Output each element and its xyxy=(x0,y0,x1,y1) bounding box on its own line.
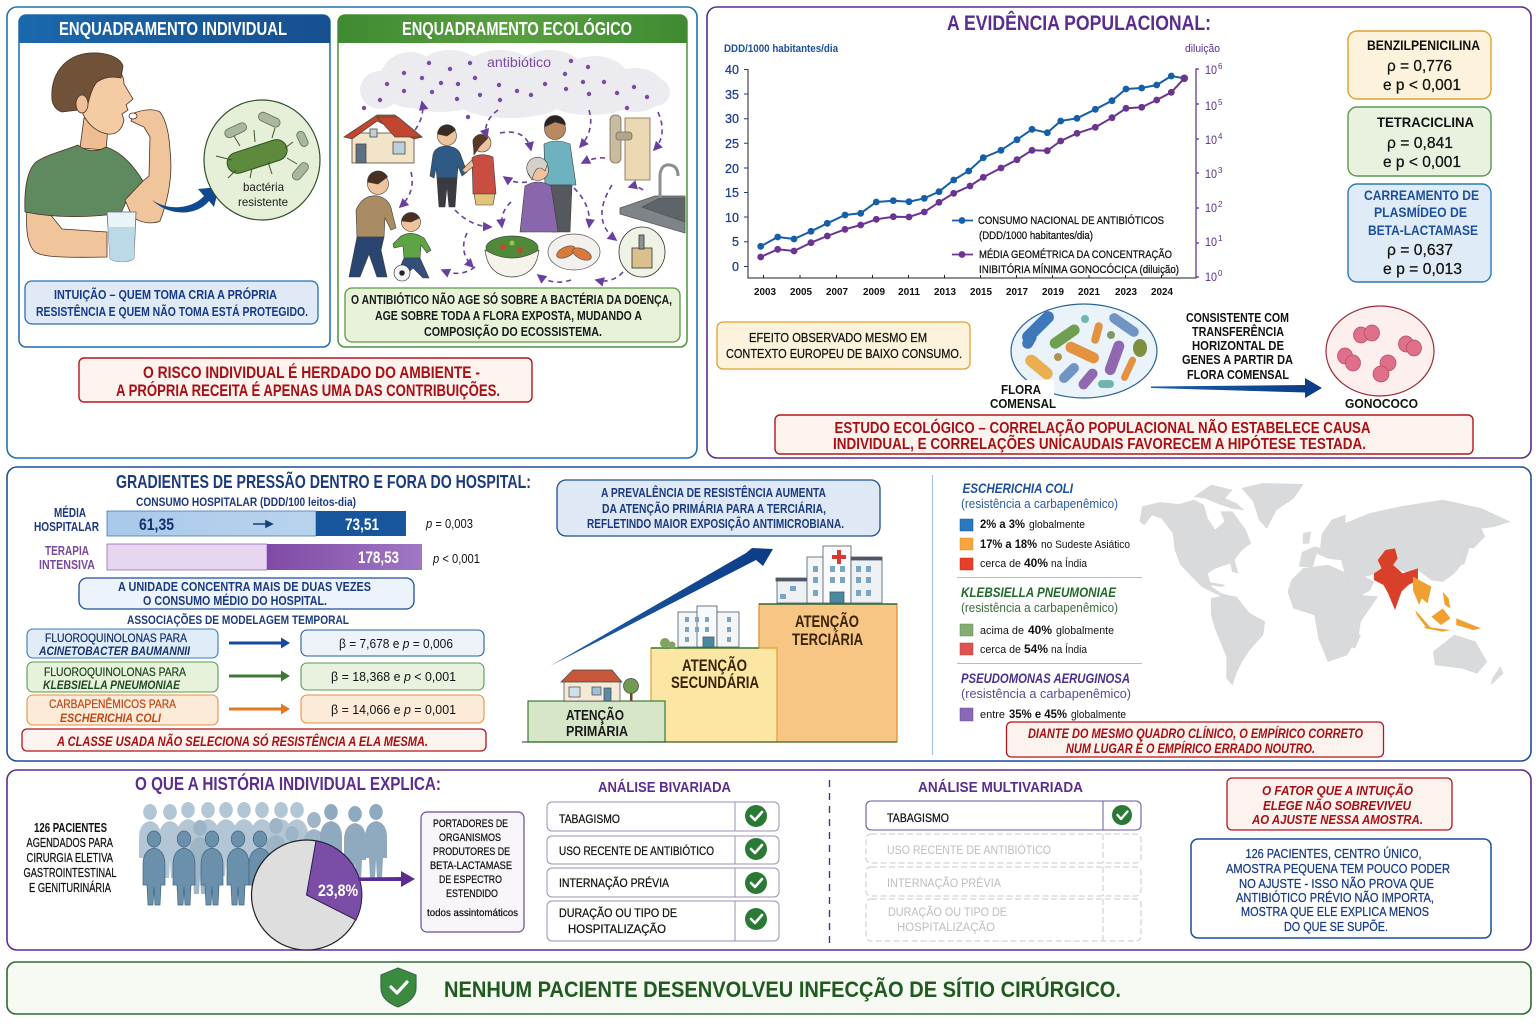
bar chart: consumo hospitalar: 61,35 xyxy=(139,515,174,534)
stat card: carreamento de plasmídeo: PLASMÍDEO DE xyxy=(1374,204,1467,220)
panel: gradientes de pressão xyxy=(7,467,1531,761)
callout: unidade concentra xyxy=(79,578,414,609)
icon: gonococo xyxy=(1326,306,1434,411)
line chart: consumo e MIC: 30 xyxy=(725,111,739,126)
icon: gonococo: GONOCOCO xyxy=(1345,396,1418,411)
row: fluoroquinolonas e acinetobacter: ACINETOBACTER BAUMANNII xyxy=(38,644,191,658)
bar chart: consumo hospitalar: INTENSIVA xyxy=(39,558,95,572)
callout: amostra pequena xyxy=(1191,839,1491,938)
card: portadores ESBL: ESTENDIDO xyxy=(446,888,498,900)
line chart: consumo e MIC: 10 xyxy=(1205,135,1217,147)
row: fluoroquinolonas e klebsiella xyxy=(27,662,484,692)
stat card: benzilpenicilina xyxy=(1348,31,1491,99)
line chart: consumo e MIC: 2024 xyxy=(1151,286,1173,298)
divider: map section xyxy=(932,475,934,755)
arrow: para portadores xyxy=(358,871,415,887)
arrow: rising resistance xyxy=(550,548,773,666)
column: análise bivariada: ANÁLISE BIVARIADA xyxy=(598,779,731,796)
line chart: consumo e MIC: 25 xyxy=(725,136,739,151)
line chart: consumo e MIC: 3 xyxy=(1218,166,1223,175)
card: portadores ESBL: todos assintomáticos xyxy=(427,907,518,919)
callout: contexto europeu: EFEITO OBSERVADO MESMO EM xyxy=(749,330,927,345)
card: portadores ESBL: ORGANISMOS xyxy=(439,832,501,844)
chart legend: INIBITÓRIA MÍNIMA GONOCÓCICA (diluição) xyxy=(979,263,1179,276)
line chart: consumo e MIC: diluição xyxy=(1185,43,1220,55)
data series: MIC gonocócica xyxy=(757,74,1188,260)
legend: escherichia coli xyxy=(960,480,1130,570)
callout: amostra pequena: ANTIBIÓTICO PRÉVIO NÃO IMPORTA, xyxy=(1236,890,1434,905)
stat card: carreamento de plasmídeo: e p = 0,013 xyxy=(1383,261,1462,278)
card: portadores ESBL: PRODUTORES DE xyxy=(433,846,510,858)
line chart: consumo e MIC: 10 xyxy=(1205,203,1217,215)
column: análise multivariada: DURAÇÃO OU TIPO DE xyxy=(888,905,1007,919)
line chart: consumo e MIC: DDD/1000 habitantes/dia xyxy=(724,43,839,55)
icon: house xyxy=(344,115,422,163)
line chart: consumo e MIC: 4 xyxy=(1218,132,1223,141)
line chart: consumo e MIC: 2021 xyxy=(1078,286,1100,298)
card: portadores ESBL: DE ESPECTRO xyxy=(439,874,502,886)
column: análise bivariada: DURAÇÃO OU TIPO DE xyxy=(559,906,677,920)
card: portadores ESBL: PORTADORES DE xyxy=(433,818,508,830)
legend: klebsiella pneumoniae: na Índia xyxy=(1051,643,1088,656)
chart legend xyxy=(952,214,1179,276)
callout: empírico correto xyxy=(1006,722,1384,757)
callout: fator que a intuição elege: ELEGE NÃO SOBREVIVEU xyxy=(1263,798,1412,813)
callout: prevalência aumenta: REFLETINDO MAIOR EXPOSIÇÃO ANTIMICROBIANA. xyxy=(587,516,844,531)
callout: intuição xyxy=(25,281,318,324)
heading: enquadramento individual: ENQUADRAMENTO INDIVIDUAL xyxy=(59,19,287,39)
legend: klebsiella pneumoniae: (resistência a carbapenêmico) xyxy=(961,601,1118,615)
text: conclusão: NENHUM PACIENTE DESENVOLVEU INFECÇÃO DE SÍTIO CIRÚRGICO. xyxy=(444,977,1121,1002)
line chart: consumo e MIC: 2005 xyxy=(790,286,812,298)
map: world resistance xyxy=(1140,483,1510,685)
legend: escherichia coli: ESCHERICHIA COLI xyxy=(962,480,1074,496)
step: atenção primária: ATENÇÃO xyxy=(566,706,624,724)
callout: antibiótico age sobre a flora: O ANTIBIÓTICO NÃO AGE SÓ SOBRE A BACTÉRIA DA DOENÇA, xyxy=(351,292,672,307)
heading: a evidência populacional: A EVIDÊNCIA POPULACIONAL: xyxy=(947,11,1211,35)
callout: intuição: RESISTÊNCIA E QUEM NÃO TOMA ESTÁ PROTEGIDO. xyxy=(36,304,308,319)
text block: 126 pacientes: 126 PACIENTES xyxy=(34,821,107,835)
pie chart: 23,8%: 23,8% xyxy=(318,881,358,900)
column: análise multivariada: HOSPITALIZAÇÃO xyxy=(897,920,995,934)
legend: escherichia coli: no Sudeste Asiático xyxy=(1041,539,1130,551)
icon: resistant bacterium circle: resistente xyxy=(238,195,288,209)
stat card: carreamento de plasmídeo xyxy=(1348,184,1491,282)
callout: estudo ecológico: ESTUDO ECOLÓGICO – CORRELAÇÃO POPULACIONAL NÃO ESTABELECE CAUSA xyxy=(834,419,1370,437)
panel: o que a história individual explica xyxy=(7,770,1531,950)
callout: amostra pequena: AMOSTRA PEQUENA TEM POUCO PODER xyxy=(1226,861,1450,876)
row: fluoroquinolonas e acinetobacter: FLUOROQUINOLONAS PARA xyxy=(45,631,187,645)
heading: enquadramento ecológico xyxy=(338,15,687,43)
stat card: benzilpenicilina: BENZILPENICILINA xyxy=(1367,37,1480,53)
line chart: consumo e MIC: 0 xyxy=(732,259,739,274)
icon: couple talking xyxy=(430,125,496,207)
callout: estudo ecológico xyxy=(775,415,1473,454)
column: análise multivariada: TABAGISMO xyxy=(887,811,949,825)
line chart: consumo e MIC: 2023 xyxy=(1115,286,1137,298)
column: análise multivariada: INTERNAÇÃO PRÉVIA xyxy=(887,875,1001,890)
icon: dashed transmission arrows xyxy=(400,102,662,282)
text block: 126 pacientes: AGENDADOS PARA xyxy=(26,836,113,850)
icon: salad bowl xyxy=(485,236,539,277)
icon: flora comensal: FLORA xyxy=(1001,382,1042,397)
column: análise bivariada: TABAGISMO xyxy=(559,812,620,826)
line chart: consumo e MIC: 35 xyxy=(725,87,739,102)
stat card: carreamento de plasmídeo: BETA-LACTAMASE xyxy=(1368,222,1478,238)
legend: pseudomonas aeruginosa: entre xyxy=(980,709,1005,721)
legend: klebsiella pneumoniae: globalmente xyxy=(1056,625,1114,637)
text block: 126 pacientes xyxy=(24,821,117,895)
icon: kitchen sink xyxy=(620,165,685,233)
line chart: consumo e MIC: 5 xyxy=(732,234,739,249)
row: carbapenêmicos e escherichia xyxy=(27,695,484,725)
step: atenção secundária: SECUNDÁRIA xyxy=(671,673,759,692)
icon: tertiary hospital xyxy=(776,546,882,603)
panel: enquadramento individual vs ecológico xyxy=(7,7,697,458)
column: análise bivariada: USO RECENTE DE ANTIBIÓTICO xyxy=(559,843,714,858)
banner: nenhum paciente xyxy=(7,962,1531,1014)
icon: crowd of patients xyxy=(139,802,387,905)
legend: pseudomonas aeruginosa: (resistência a carbapenêmico) xyxy=(961,687,1131,701)
legend: pseudomonas aeruginosa: 35% e 45% xyxy=(1009,709,1067,721)
icon: resistant bacterium circle: bactéria xyxy=(243,180,284,194)
panel: enquadramento ecológico xyxy=(338,15,687,347)
line chart: consumo e MIC: 2 xyxy=(1218,200,1223,209)
step: atenção secundária xyxy=(651,648,777,742)
arrow: flora para gonococo xyxy=(1151,378,1322,398)
icon: plate of meat xyxy=(548,234,600,270)
legend: pseudomonas aeruginosa: PSEUDOMONAS AERUGINOSA xyxy=(961,670,1130,686)
icon: clinic xyxy=(561,670,638,701)
legend: escherichia coli: 40% xyxy=(1024,558,1048,570)
line chart: consumo e MIC: 10 xyxy=(1205,272,1217,284)
stat card: tetraciclina: e p < 0,001 xyxy=(1383,154,1461,171)
line chart: consumo e MIC: 10 xyxy=(1205,169,1217,181)
row: fluoroquinolonas e klebsiella: FLUOROQUINOLONAS PARA xyxy=(44,665,186,679)
line chart: consumo e MIC: 10 xyxy=(1205,101,1217,113)
step: atenção secundária: ATENÇÃO xyxy=(682,655,747,675)
row: fluoroquinolonas e acinetobacter xyxy=(27,629,484,658)
line chart: consumo e MIC: 2013 xyxy=(934,286,956,298)
card: portadores ESBL: BETA-LACTAMASE xyxy=(430,860,512,872)
line chart: consumo e MIC: 0 xyxy=(1218,269,1223,278)
chart legend: CONSUMO NACIONAL DE ANTIBIÓTICOS xyxy=(978,214,1164,227)
legend: klebsiella pneumoniae xyxy=(960,584,1118,656)
callout: empírico correto: DIANTE DO MESMO QUADRO CLÍNICO, O EMPÍRICO CORRETO xyxy=(1028,726,1363,741)
callout: intuição: INTUIÇÃO – QUEM TOMA CRIA A PRÓPRIA xyxy=(54,287,278,302)
heading: enquadramento ecológico: ENQUADRAMENTO ECOLÓGICO xyxy=(402,18,632,39)
bar chart: consumo hospitalar: 178,53 xyxy=(358,548,399,567)
line chart: consumo e MIC: 10 xyxy=(725,210,739,225)
text block: transferência horizontal: FLORA COMENSAL xyxy=(1187,367,1289,382)
bar chart: consumo hospitalar: MÉDIA xyxy=(54,505,86,520)
card: portadores ESBL xyxy=(421,812,524,932)
text block: transferência horizontal: CONSISTENTE COM xyxy=(1186,310,1289,325)
text block: transferência horizontal xyxy=(1182,310,1294,382)
icon: antibiotic cloud: antibiótico xyxy=(487,54,551,70)
icon: flora comensal: COMENSAL xyxy=(990,396,1056,411)
panel: enquadramento individual xyxy=(19,15,330,347)
text block: transferência horizontal: HORIZONTAL DE xyxy=(1192,338,1284,353)
callout: unidade concentra: O CONSUMO MÉDIO DO HOSPITAL. xyxy=(143,593,327,608)
heading: associações temporais: ASSOCIAÇÕES DE MODELAGEM TEMPORAL xyxy=(127,612,349,627)
bar chart: consumo hospitalar: HOSPITALAR xyxy=(34,520,99,534)
line chart: consumo e MIC: 15 xyxy=(725,185,739,200)
icon: water tap circle xyxy=(619,227,665,277)
legend: escherichia coli: 2% a 3% xyxy=(980,519,1025,531)
stat card: benzilpenicilina: e p < 0,001 xyxy=(1383,77,1461,94)
panel: a evidência populacional xyxy=(707,7,1531,458)
icon: secondary hospital xyxy=(660,606,739,648)
step: atenção terciária: TERCIÁRIA xyxy=(792,630,863,649)
icon: man taking a pill xyxy=(25,53,171,262)
callout: risco individual: O RISCO INDIVIDUAL É HERDADO DO AMBIENTE - xyxy=(143,363,480,382)
column: análise multivariada: USO RECENTE DE ANTIBIÓTICO xyxy=(887,842,1051,857)
callout: estudo ecológico: INDIVIDUAL, E CORRELAÇÕES UNICAUDAIS FAVORECEM A HIPÓTESE TESTADA. xyxy=(833,435,1366,453)
bar chart: consumo hospitalar xyxy=(34,495,480,572)
text block: 126 pacientes: E GENITURINÁRIA xyxy=(29,880,111,895)
text block: 126 pacientes: GASTROINTESTINAL xyxy=(24,866,117,880)
callout: empírico correto: NUM LUGAR É O EMPÍRICO ERRADO NOUTRO. xyxy=(1066,741,1315,756)
data series: consumo nacional xyxy=(757,73,1184,250)
stat card: benzilpenicilina: ρ = 0,776 xyxy=(1387,58,1452,75)
row: carbapenêmicos e escherichia: ESCHERICHIA COLI xyxy=(60,711,162,725)
bar chart: consumo hospitalar: p < 0,001 xyxy=(432,551,480,566)
heading: história individual: O QUE A HISTÓRIA INDIVIDUAL EXPLICA: xyxy=(135,773,441,794)
line chart: consumo e MIC: 2009 xyxy=(863,286,885,298)
step: atenção terciária xyxy=(759,604,897,742)
icon: antibiotic cloud xyxy=(360,50,670,119)
step: atenção terciária: ATENÇÃO xyxy=(795,611,859,631)
row: fluoroquinolonas e klebsiella: KLEBSIELLA PNEUMONIAE xyxy=(43,678,181,692)
step: atenção primária xyxy=(528,701,665,742)
callout: unidade concentra: A UNIDADE CONCENTRA MAIS DE DUAS VEZES xyxy=(118,580,371,594)
callout: prevalência aumenta: A PREVALÊNCIA DE RESISTÊNCIA AUMENTA xyxy=(601,485,826,500)
column: análise multivariada: ANÁLISE MULTIVARIADA xyxy=(918,779,1083,796)
callout: contexto europeu: CONTEXTO EUROPEU DE BAIXO CONSUMO. xyxy=(726,346,962,361)
legend: klebsiella pneumoniae: 54% xyxy=(1024,644,1048,656)
callout: antibiótico age sobre a flora: AGE SOBRE TODA A FLORA EXPOSTA, MUDANDO A xyxy=(375,308,642,323)
legend: pseudomonas aeruginosa: globalmente xyxy=(1071,709,1126,721)
callout: amostra pequena: NO AJUSTE - ISSO NÃO PROVA QUE xyxy=(1239,876,1434,891)
text block: transferência horizontal: TRANSFERÊNCIA xyxy=(1192,324,1284,339)
line chart: consumo e MIC: 2003 xyxy=(754,286,776,298)
callout: amostra pequena: DO QUE SE SUPÕE. xyxy=(1284,919,1388,934)
icon: flora comensal xyxy=(990,304,1157,411)
stat card: carreamento de plasmídeo: CARREAMENTO DE xyxy=(1364,187,1479,203)
line chart: consumo e MIC xyxy=(724,43,1223,298)
callout: amostra pequena: MOSTRA QUE ELE EXPLICA MENOS xyxy=(1241,904,1429,919)
line chart: consumo e MIC: 2011 xyxy=(898,286,920,298)
legend: klebsiella pneumoniae: cerca de xyxy=(980,644,1021,656)
bar chart: consumo hospitalar: p = 0,003 xyxy=(425,516,473,531)
line chart: consumo e MIC: 6 xyxy=(1218,62,1223,71)
legend: klebsiella pneumoniae: KLEBSIELLA PNEUMONIAE xyxy=(961,584,1117,600)
callout: classe usada: A CLASSE USADA NÃO SELECIONA SÓ RESISTÊNCIA A ELA MESMA. xyxy=(56,734,428,749)
chart legend: MÉDIA GEOMÉTRICA DA CONCENTRAÇÃO xyxy=(979,248,1172,261)
icon: man and grandmother xyxy=(520,115,576,232)
icon: resistant bacterium circle xyxy=(204,100,320,220)
row: fluoroquinolonas e klebsiella: β = 18,368 e p < 0,001 xyxy=(331,669,456,684)
callout: prevalência aumenta: DA ATENÇÃO PRIMÁRIA PARA A TERCIÁRIA, xyxy=(602,501,826,516)
row: carbapenêmicos e escherichia: β = 14,066 e p = 0,001 xyxy=(331,702,456,717)
icon: curved arrow xyxy=(152,187,219,213)
legend: escherichia coli: na Índia xyxy=(1051,557,1088,570)
text block: transferência horizontal: GENES A PARTIR DA xyxy=(1182,352,1294,367)
bar chart: consumo hospitalar: TERAPIA xyxy=(45,544,89,558)
chart: staircase of care levels xyxy=(522,546,897,742)
stat card: tetraciclina: TETRACICLINA xyxy=(1377,114,1474,130)
legend: escherichia coli: cerca de xyxy=(980,558,1021,570)
callout: classe usada xyxy=(22,729,486,751)
bar chart: consumo hospitalar: CONSUMO HOSPITALAR (DDD/100 leitos-dia) xyxy=(136,495,356,509)
line chart: consumo e MIC: 10 xyxy=(1205,237,1217,249)
legend: klebsiella pneumoniae: 40% xyxy=(1028,625,1052,637)
row: carbapenêmicos e escherichia: CARBAPENÊMICOS PARA xyxy=(49,696,176,711)
step: atenção primária: PRIMÁRIA xyxy=(566,723,628,740)
line chart: consumo e MIC: 20 xyxy=(725,161,739,176)
line chart: consumo e MIC: 5 xyxy=(1218,98,1223,107)
callout: antibiótico age sobre a flora xyxy=(345,288,680,342)
column: análise bivariada: HOSPITALIZAÇÃO xyxy=(568,922,666,936)
callout: risco individual xyxy=(79,358,532,402)
icon: father and child playing football xyxy=(349,171,431,281)
text block: 126 pacientes: CIRURGIA ELETIVA xyxy=(26,851,113,865)
heading: enquadramento individual xyxy=(19,15,330,43)
column: análise bivariada xyxy=(547,779,779,941)
callout: fator que a intuição elege xyxy=(1227,778,1452,830)
line chart: consumo e MIC: 2019 xyxy=(1042,286,1064,298)
stat card: tetraciclina xyxy=(1348,107,1491,176)
stat card: carreamento de plasmídeo: ρ = 0,637 xyxy=(1387,242,1453,259)
legend: escherichia coli: 17% a 18% xyxy=(980,539,1037,551)
line chart: consumo e MIC: 40 xyxy=(725,62,739,77)
callout: contexto europeu xyxy=(717,322,970,369)
line chart: consumo e MIC: 2007 xyxy=(826,286,848,298)
callout: prevalência aumenta xyxy=(557,480,880,536)
heading: gradientes de pressão: GRADIENTES DE PRESSÃO DENTRO E FORA DO HOSPITAL: xyxy=(116,471,531,492)
bar chart: consumo hospitalar: 73,51 xyxy=(345,515,379,534)
line chart: consumo e MIC: 2015 xyxy=(970,286,992,298)
column: análise bivariada: INTERNAÇÃO PRÉVIA xyxy=(559,875,669,890)
line chart: consumo e MIC: 2017 xyxy=(1006,286,1028,298)
chart legend: (DDD/1000 habitantes/dia) xyxy=(979,230,1093,242)
column: análise multivariada xyxy=(866,779,1141,941)
legend: klebsiella pneumoniae: acima de xyxy=(980,625,1024,637)
row: fluoroquinolonas e acinetobacter: β = 7,678 e p = 0,006 xyxy=(339,636,453,651)
legend: escherichia coli: (resistência a carbapenêmico) xyxy=(961,497,1118,511)
legend: pseudomonas aeruginosa xyxy=(960,670,1131,721)
line chart: consumo e MIC: 1 xyxy=(1218,234,1223,243)
stat card: tetraciclina: ρ = 0,841 xyxy=(1387,135,1453,152)
callout: amostra pequena: 126 PACIENTES, CENTRO ÚNICO, xyxy=(1246,846,1422,861)
callout: fator que a intuição elege: AO AJUSTE NESSA AMOSTRA. xyxy=(1251,812,1423,827)
icon: shield check xyxy=(381,968,416,1007)
line chart: consumo e MIC: 10 xyxy=(1205,65,1217,77)
callout: fator que a intuição elege: O FATOR QUE A INTUIÇÃO xyxy=(1262,783,1413,798)
callout: risco individual: A PRÓPRIA RECEITA É APENAS UMA DAS CONTRIBUIÇÕES. xyxy=(116,380,500,400)
callout: antibiótico age sobre a flora: COMPOSIÇÃO DO ECOSSISTEMA. xyxy=(424,324,602,339)
icon: door handle xyxy=(610,115,650,180)
legend: escherichia coli: globalmente xyxy=(1029,519,1085,531)
pie chart: 23,8% xyxy=(252,840,362,950)
